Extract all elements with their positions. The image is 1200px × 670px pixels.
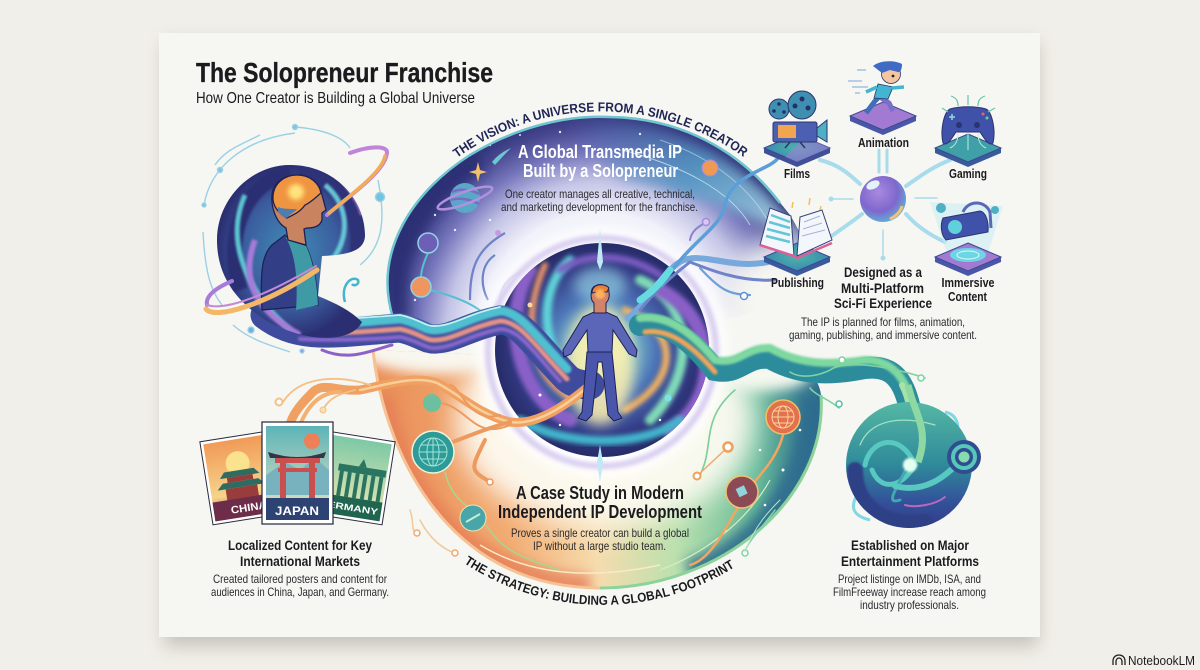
multi-platform heading: Multi-Platform bbox=[841, 280, 924, 296]
case study heading: A Case Study in Modern bbox=[516, 482, 684, 503]
label: immersive content: Content bbox=[948, 290, 988, 304]
localized heading: International Markets bbox=[240, 553, 360, 569]
outer orbit lines bbox=[202, 124, 384, 353]
spiral flourish bbox=[344, 279, 358, 302]
notebooklm mark bbox=[1113, 653, 1195, 668]
panel: posters bbox=[200, 422, 395, 525]
icon: platform disc bbox=[846, 385, 981, 528]
dome body: One creator manages all creative, technical, bbox=[505, 187, 695, 201]
localized heading bbox=[228, 537, 372, 569]
poster: china: CHINA bbox=[230, 499, 268, 517]
dome body: and marketing development for the franchise. bbox=[501, 200, 698, 214]
poster: japan: JAPAN bbox=[275, 504, 319, 518]
halo ring bbox=[488, 238, 716, 466]
localized body: Created tailored posters and content for bbox=[213, 572, 387, 586]
icon: camera node bbox=[726, 476, 758, 508]
icon: ringed planet bbox=[436, 148, 511, 214]
icon: small green planet bbox=[423, 394, 441, 412]
icon: animation bbox=[848, 61, 916, 135]
subtitle: How One Creator is Building a Global Universe bbox=[196, 90, 475, 107]
poster: germany bbox=[315, 431, 395, 525]
multi-platform body bbox=[789, 315, 977, 342]
label: publishing: Publishing bbox=[771, 276, 824, 290]
dome body bbox=[501, 187, 698, 214]
icon: immersive content bbox=[930, 202, 1003, 276]
case study body: Proves a single creator can build a global bbox=[511, 526, 689, 540]
stream: green to nodes bbox=[690, 435, 783, 565]
wordmark: NotebookLM bbox=[1128, 653, 1195, 668]
icon: films bbox=[764, 91, 830, 167]
localized body: audiences in China, Japan, and Germany. bbox=[211, 585, 389, 599]
stream: centre to platforms bbox=[640, 318, 925, 480]
icon: notebooklm bbox=[1113, 655, 1125, 665]
panel: infographic card bbox=[159, 33, 1040, 637]
platforms heading bbox=[841, 537, 979, 569]
case study text block bbox=[498, 482, 702, 553]
dome heading: Built by a Solopreneur bbox=[523, 161, 678, 181]
case study heading: Independent IP Development bbox=[498, 501, 702, 522]
brain glow bbox=[288, 184, 304, 200]
icon: gaming bbox=[935, 95, 1001, 167]
platforms text block bbox=[833, 537, 986, 612]
light beam bbox=[597, 228, 603, 482]
label: animation: Animation bbox=[858, 136, 909, 150]
icon: planets and tendrils bbox=[411, 160, 718, 325]
hub connectors bbox=[820, 150, 950, 260]
label: immersive content: Immersive bbox=[942, 276, 995, 290]
icon: music node bbox=[460, 505, 486, 531]
case study body bbox=[511, 526, 689, 553]
multi-platform heading: Designed as a bbox=[844, 264, 922, 280]
panel: vision dome bbox=[386, 116, 798, 325]
stream: head to centre bbox=[265, 307, 590, 385]
multi-platform heading: Sci-Fi Experience bbox=[834, 295, 932, 311]
dome text block bbox=[501, 142, 698, 214]
figure head glow bbox=[595, 289, 605, 299]
panel: strategy bowl bbox=[372, 350, 823, 590]
platforms body: FilmFreeway increase reach among bbox=[833, 585, 986, 599]
multi-platform body: gaming, publishing, and immersive content. bbox=[789, 328, 977, 342]
multi-platform text block bbox=[789, 264, 977, 342]
multi-platform body: The IP is planned for films, animation, bbox=[801, 315, 965, 329]
dome fade along the lower edge bbox=[670, 315, 780, 355]
platforms body: industry professionals. bbox=[860, 598, 959, 612]
halo around the core bbox=[478, 228, 726, 476]
case study heading bbox=[498, 482, 702, 522]
stream: orange to posters bbox=[276, 379, 590, 556]
orbit ring bbox=[206, 147, 387, 313]
poster: germany: GERMANY bbox=[318, 498, 379, 517]
poster: japan bbox=[262, 422, 333, 524]
label: immersive content bbox=[942, 276, 995, 304]
dome heading: A Global Transmedia IP bbox=[518, 142, 682, 162]
stream: centre to films and publishing bbox=[628, 158, 778, 318]
multi-platform heading bbox=[834, 264, 932, 311]
platforms body: Project listinge on IMDb, ISA, and bbox=[838, 572, 981, 586]
panel: central swirl core bbox=[495, 243, 709, 457]
poster: china bbox=[200, 431, 280, 525]
dome fade on the right bbox=[723, 236, 867, 360]
case study body: IP without a large studio team. bbox=[533, 539, 666, 553]
dome heading bbox=[518, 142, 682, 181]
title block bbox=[196, 57, 493, 107]
label: films: Films bbox=[784, 167, 810, 181]
platforms heading: Entertainment Platforms bbox=[841, 553, 979, 569]
localized heading: Localized Content for Key bbox=[228, 537, 372, 553]
label: gaming: Gaming bbox=[949, 167, 987, 181]
curved label: the strategy: THE STRATEGY: BUILDING A GLOBAL FOOTPRINT bbox=[466, 556, 732, 605]
icon: globe bbox=[412, 431, 560, 570]
central orb bbox=[860, 176, 906, 222]
panel: creator head bbox=[202, 124, 387, 353]
card shadow bbox=[164, 42, 1038, 646]
icon: publishing bbox=[760, 198, 832, 276]
icon: orange globe node bbox=[766, 400, 800, 434]
creator figure bbox=[261, 175, 326, 310]
platforms body bbox=[833, 572, 986, 612]
central figure bbox=[563, 285, 637, 421]
platforms heading: Established on Major bbox=[851, 537, 969, 553]
curved label: the vision: THE VISION: A UNIVERSE FROM A SINGLE CREATOR bbox=[452, 102, 748, 157]
localized body bbox=[211, 572, 389, 599]
localized text block bbox=[211, 537, 389, 599]
title: The Solopreneur Franchise bbox=[196, 57, 493, 88]
